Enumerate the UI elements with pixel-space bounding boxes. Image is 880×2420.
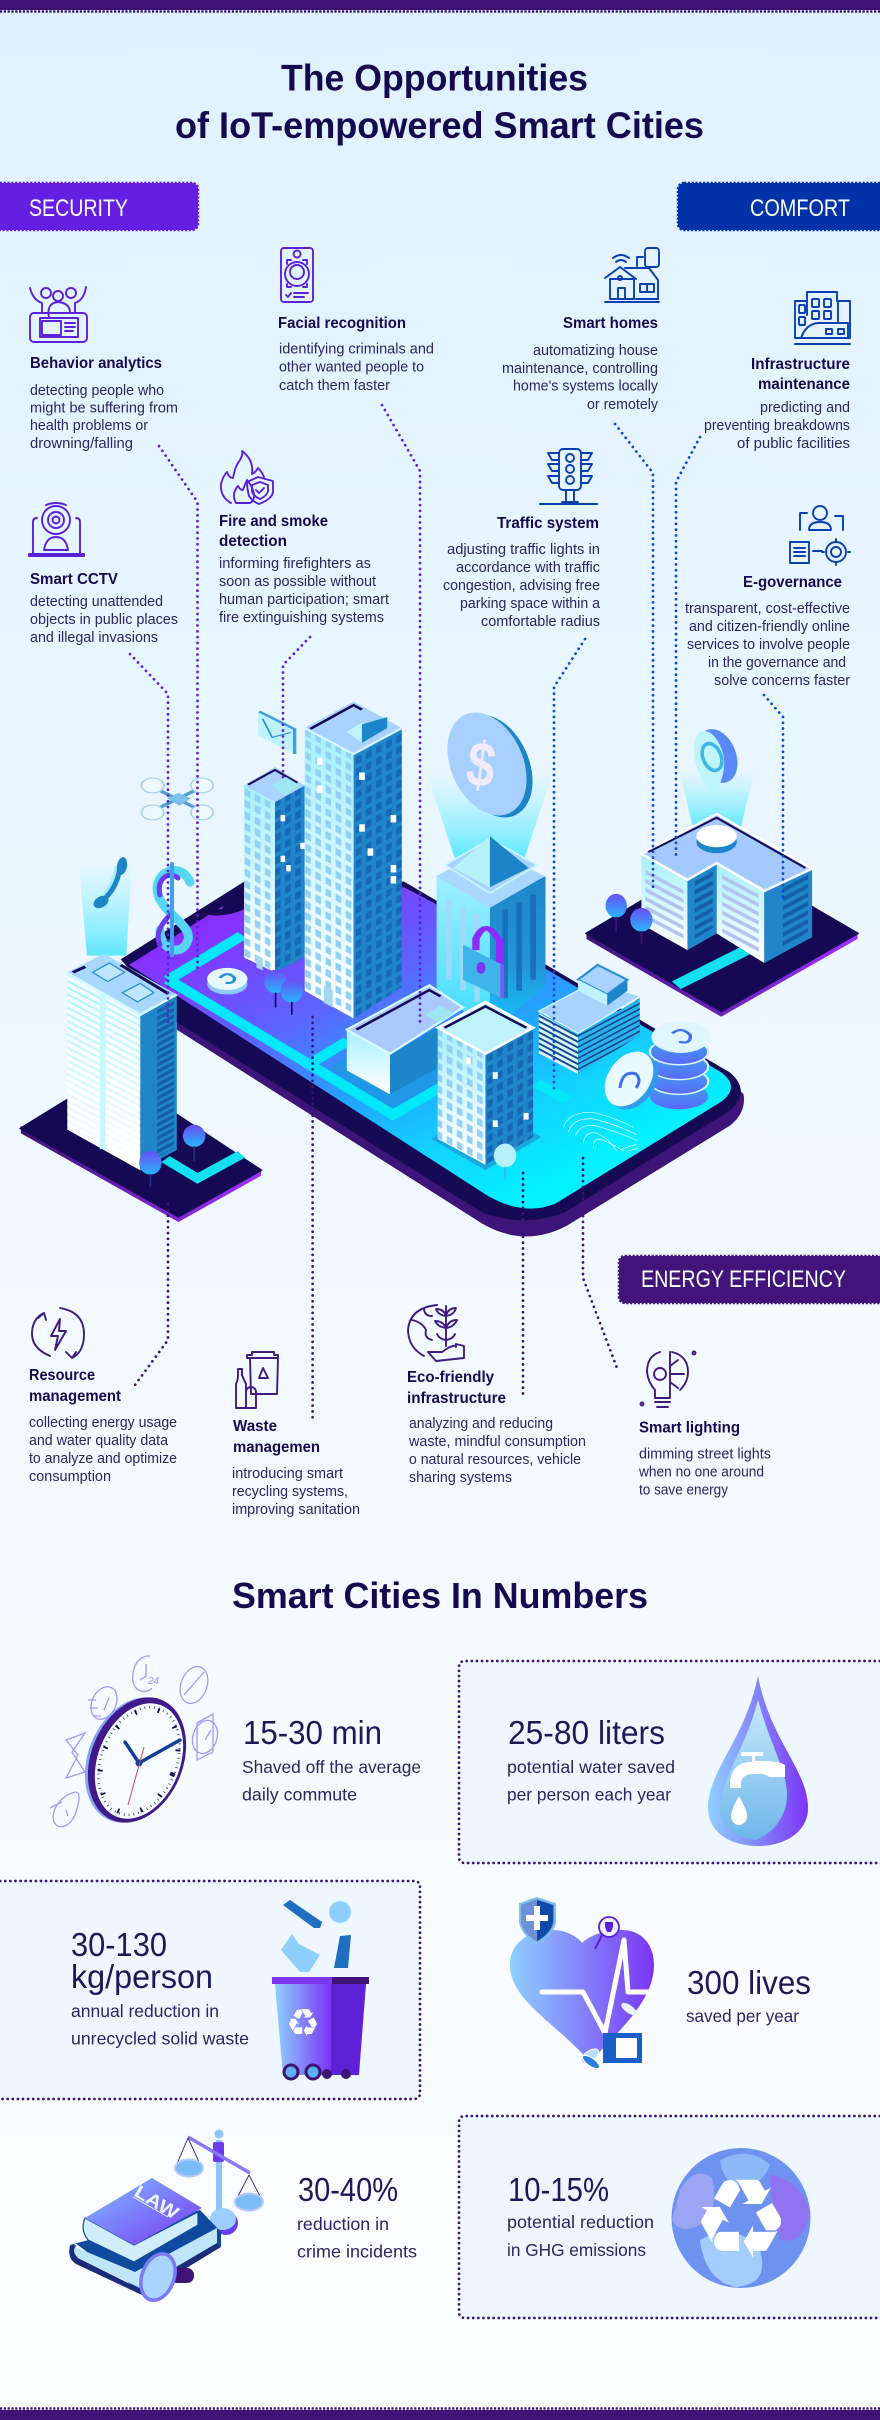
icon: people with tablet [30,287,87,342]
icon: recycling bin with rubbish: ♻ [286,2001,320,2045]
block: facial recognition: Facial recognition [278,315,406,332]
block: eco-friendly infrastructure [407,1305,586,1486]
icon: globe with recycling symbol: ♻ [692,2155,790,2283]
stat: waste: 30-130 [71,1926,167,1963]
stat: commute: Shaved off the average [242,1757,421,1777]
block: infrastructure maintenance [704,292,850,452]
icon: law books and scales: LAW [131,2181,182,2223]
block: waste management: managemen [233,1439,320,1456]
block: smart homes: Smart homes [563,315,658,332]
block: smart lighting: dimming street lights [639,1446,771,1462]
stat: commute: daily commute [242,1784,357,1804]
block: fire and smoke detection: soon as possible without [219,574,376,590]
block: fire and smoke detection: fire extinguishing systems [219,610,384,626]
block: resource management: consumption [29,1469,111,1485]
icon: recycling bin with bottles [236,1352,278,1408]
icon: traffic light [540,449,597,504]
drone [141,778,213,820]
block: behavior analytics: might be suffering from [30,400,178,416]
icon: clock: 24 [147,1676,160,1687]
icon: fingerprint [563,1112,638,1151]
right block with building [586,769,858,1017]
connector lines: comfort [554,424,783,1093]
stat: water [507,1676,808,1846]
block: eco-friendly infrastructure: waste, mindful consumption [408,1434,586,1450]
connector lines: energy [135,1017,617,1422]
block: smart cctv [29,503,178,646]
stat: lives: 300 lives [687,1964,811,2001]
block: eco-friendly infrastructure: o natural resources, vehicle [409,1452,581,1468]
stat: water: 25-80 liters [508,1714,665,1751]
block: fire and smoke detection: informing firefighters as [219,556,371,572]
block: smart cctv: objects in public places [30,612,178,628]
block: e-governance: services to involve people [687,637,850,653]
stat: lives [510,1898,811,2071]
block: smart homes: or remotely [587,397,659,413]
stat: waste [71,1900,369,2079]
icon: floating dollar [157,864,190,955]
block: facial recognition: other wanted people to [279,360,424,376]
block: waste management: recycling systems, [232,1484,348,1500]
block: smart cctv: Smart CCTV [30,571,118,588]
block: resource management: to analyze and optimize [29,1451,177,1467]
stat: commute [50,1656,421,1837]
block: behavior analytics: health problems or [30,418,148,434]
block: e-governance: solve concerns faster [714,673,850,689]
block: fire and smoke detection: detection [219,533,287,550]
block: behavior analytics: detecting people who [30,383,164,399]
icon: globe with sprout [408,1305,464,1361]
stat: waste: unrecycled solid waste [71,2028,249,2048]
icon: heart with pulse [510,1898,654,2071]
block: traffic system: accordance with traffic [456,560,600,576]
icon: floating phone [91,856,128,911]
block: resource management [29,1308,177,1485]
block: eco-friendly infrastructure: sharing systems [409,1470,512,1486]
badge: comfort: COMFORT [750,195,850,222]
connector lines: security [130,405,420,1024]
icon: floating dollar coin [432,700,548,830]
icon: recycling bin with rubbish [272,1900,369,2079]
badge: security [0,183,198,230]
icon: floating dollar coin: $ [462,728,500,802]
stat: water: potential water saved [507,1757,675,1777]
building E [431,1002,542,1170]
icon: cycle with bolt [32,1308,84,1358]
block: traffic system: parking space within a [460,596,601,612]
block: smart homes: maintenance, controlling [502,361,658,377]
block: fire and smoke detection: Fire and smoke [219,513,328,530]
block: behavior analytics: Behavior analytics [30,355,162,372]
stat: emissions: in GHG emissions [507,2240,646,2260]
icon: clock [50,1656,222,1837]
block: behavior analytics [30,287,178,452]
top bar [0,0,880,12]
icon: house with wifi [605,248,659,302]
block: e-governance: in the governance and [708,655,846,671]
title: of IoT-empowered Smart Cities [175,105,704,146]
tower C with beam and lock [427,772,553,1032]
block: traffic system: adjusting traffic lights in [447,542,600,558]
block: waste management: Waste [233,1418,277,1435]
icon: water drop with tap [708,1676,808,1846]
stat: crime: 30-40% [298,2171,398,2208]
block: e-governance: and citizen-friendly online [689,619,850,635]
block: resource management: Resource [29,1367,95,1384]
badge: comfort [678,183,880,230]
title: The Opportunities [281,58,588,98]
icon: law books and scales [69,2130,263,2305]
block: smart lighting [638,1352,771,1498]
block: smart lighting: when no one around [638,1464,764,1480]
stat: emissions: 10-15% [508,2171,609,2208]
building F striped [539,965,640,1074]
block: infrastructure maintenance: preventing breakdowns [704,418,850,434]
section heading: Smart Cities In Numbers [232,1575,648,1616]
stat: water: per person each year [507,1784,671,1804]
block: smart lighting: Smart lighting [639,1420,740,1436]
stat: emissions: potential reduction [507,2212,654,2232]
badge: security: SECURITY [29,195,128,222]
building D [347,985,463,1094]
block: infrastructure maintenance: of public facilities [737,436,850,452]
block: facial recognition: catch them faster [279,378,390,394]
left block with tower [21,861,261,1222]
block: smart cctv: detecting unattended [30,594,163,610]
icon: buildings and train [795,292,850,344]
block: e-governance: E-governance [743,574,842,591]
isometric scene [21,701,858,1236]
icon: bulb with circuit [640,1352,696,1407]
block: infrastructure maintenance: maintenance [758,376,850,393]
block: e-governance: transparent, cost-effective [685,601,850,617]
title [175,58,704,146]
block: smart homes [502,248,659,413]
block: waste management [232,1352,360,1518]
block: eco-friendly infrastructure: infrastructure [407,1390,506,1407]
block: traffic system [443,449,601,630]
badge: energy efficiency [619,1256,880,1303]
stat: crime: crime incidents [297,2242,417,2262]
tower A [244,767,305,972]
block: smart lighting: to save energy [639,1482,729,1498]
block: fire and smoke detection: human participation; smart [219,592,389,608]
block: e-governance [685,506,850,689]
icon: flame and shield [221,451,273,504]
stat panel backgrounds [0,1661,880,2318]
block: behavior analytics: drowning/falling [30,436,133,452]
stat: emissions [507,2148,810,2288]
stat: waste: annual reduction in [71,2001,219,2021]
block: infrastructure maintenance: predicting and [760,400,850,416]
block: facial recognition: identifying criminals and [279,342,434,358]
bottom bar [0,2408,880,2420]
mail icon [258,711,295,754]
stat: waste: kg/person [71,1958,213,1995]
stat: commute: 15-30 min [243,1714,382,1751]
block: waste management: improving sanitation [232,1502,360,1518]
block: smart cctv: and illegal invasions [30,630,158,646]
stat: crime [69,2130,417,2305]
block: fire and smoke detection [219,451,389,626]
block: traffic system: congestion, advising free [443,578,600,594]
block: resource management: collecting energy usage [29,1415,177,1431]
block: facial recognition [278,248,434,394]
icon: globe with recycling symbol [672,2148,810,2288]
stat: lives: saved per year [686,2006,799,2026]
block: resource management: and water quality data [29,1433,169,1449]
block: resource management: management [29,1388,122,1405]
city illustration [21,700,858,1236]
icon: person, document and gear [790,506,850,565]
block: eco-friendly infrastructure: analyzing and reducing [409,1416,553,1432]
block: smart homes: home's systems locally [513,378,659,394]
tower B [305,701,402,1019]
small coin and trees [207,968,516,1180]
icon: phone face scan [281,248,313,302]
coins stack [650,1021,710,1109]
block: smart homes: automatizing house [533,343,658,359]
main phone platform [121,882,744,1236]
icon: location pin [689,723,745,797]
icon: leaning coin [595,1042,668,1119]
block: traffic system: Traffic system [497,515,599,532]
block: eco-friendly infrastructure: Eco-friendly [407,1369,494,1386]
block: infrastructure maintenance: Infrastructure [751,356,850,373]
block: traffic system: comfortable radius [481,614,600,630]
block: waste management: introducing smart [232,1466,343,1482]
stat: crime: reduction in [297,2214,389,2234]
icon: camera on laptop [29,503,84,556]
